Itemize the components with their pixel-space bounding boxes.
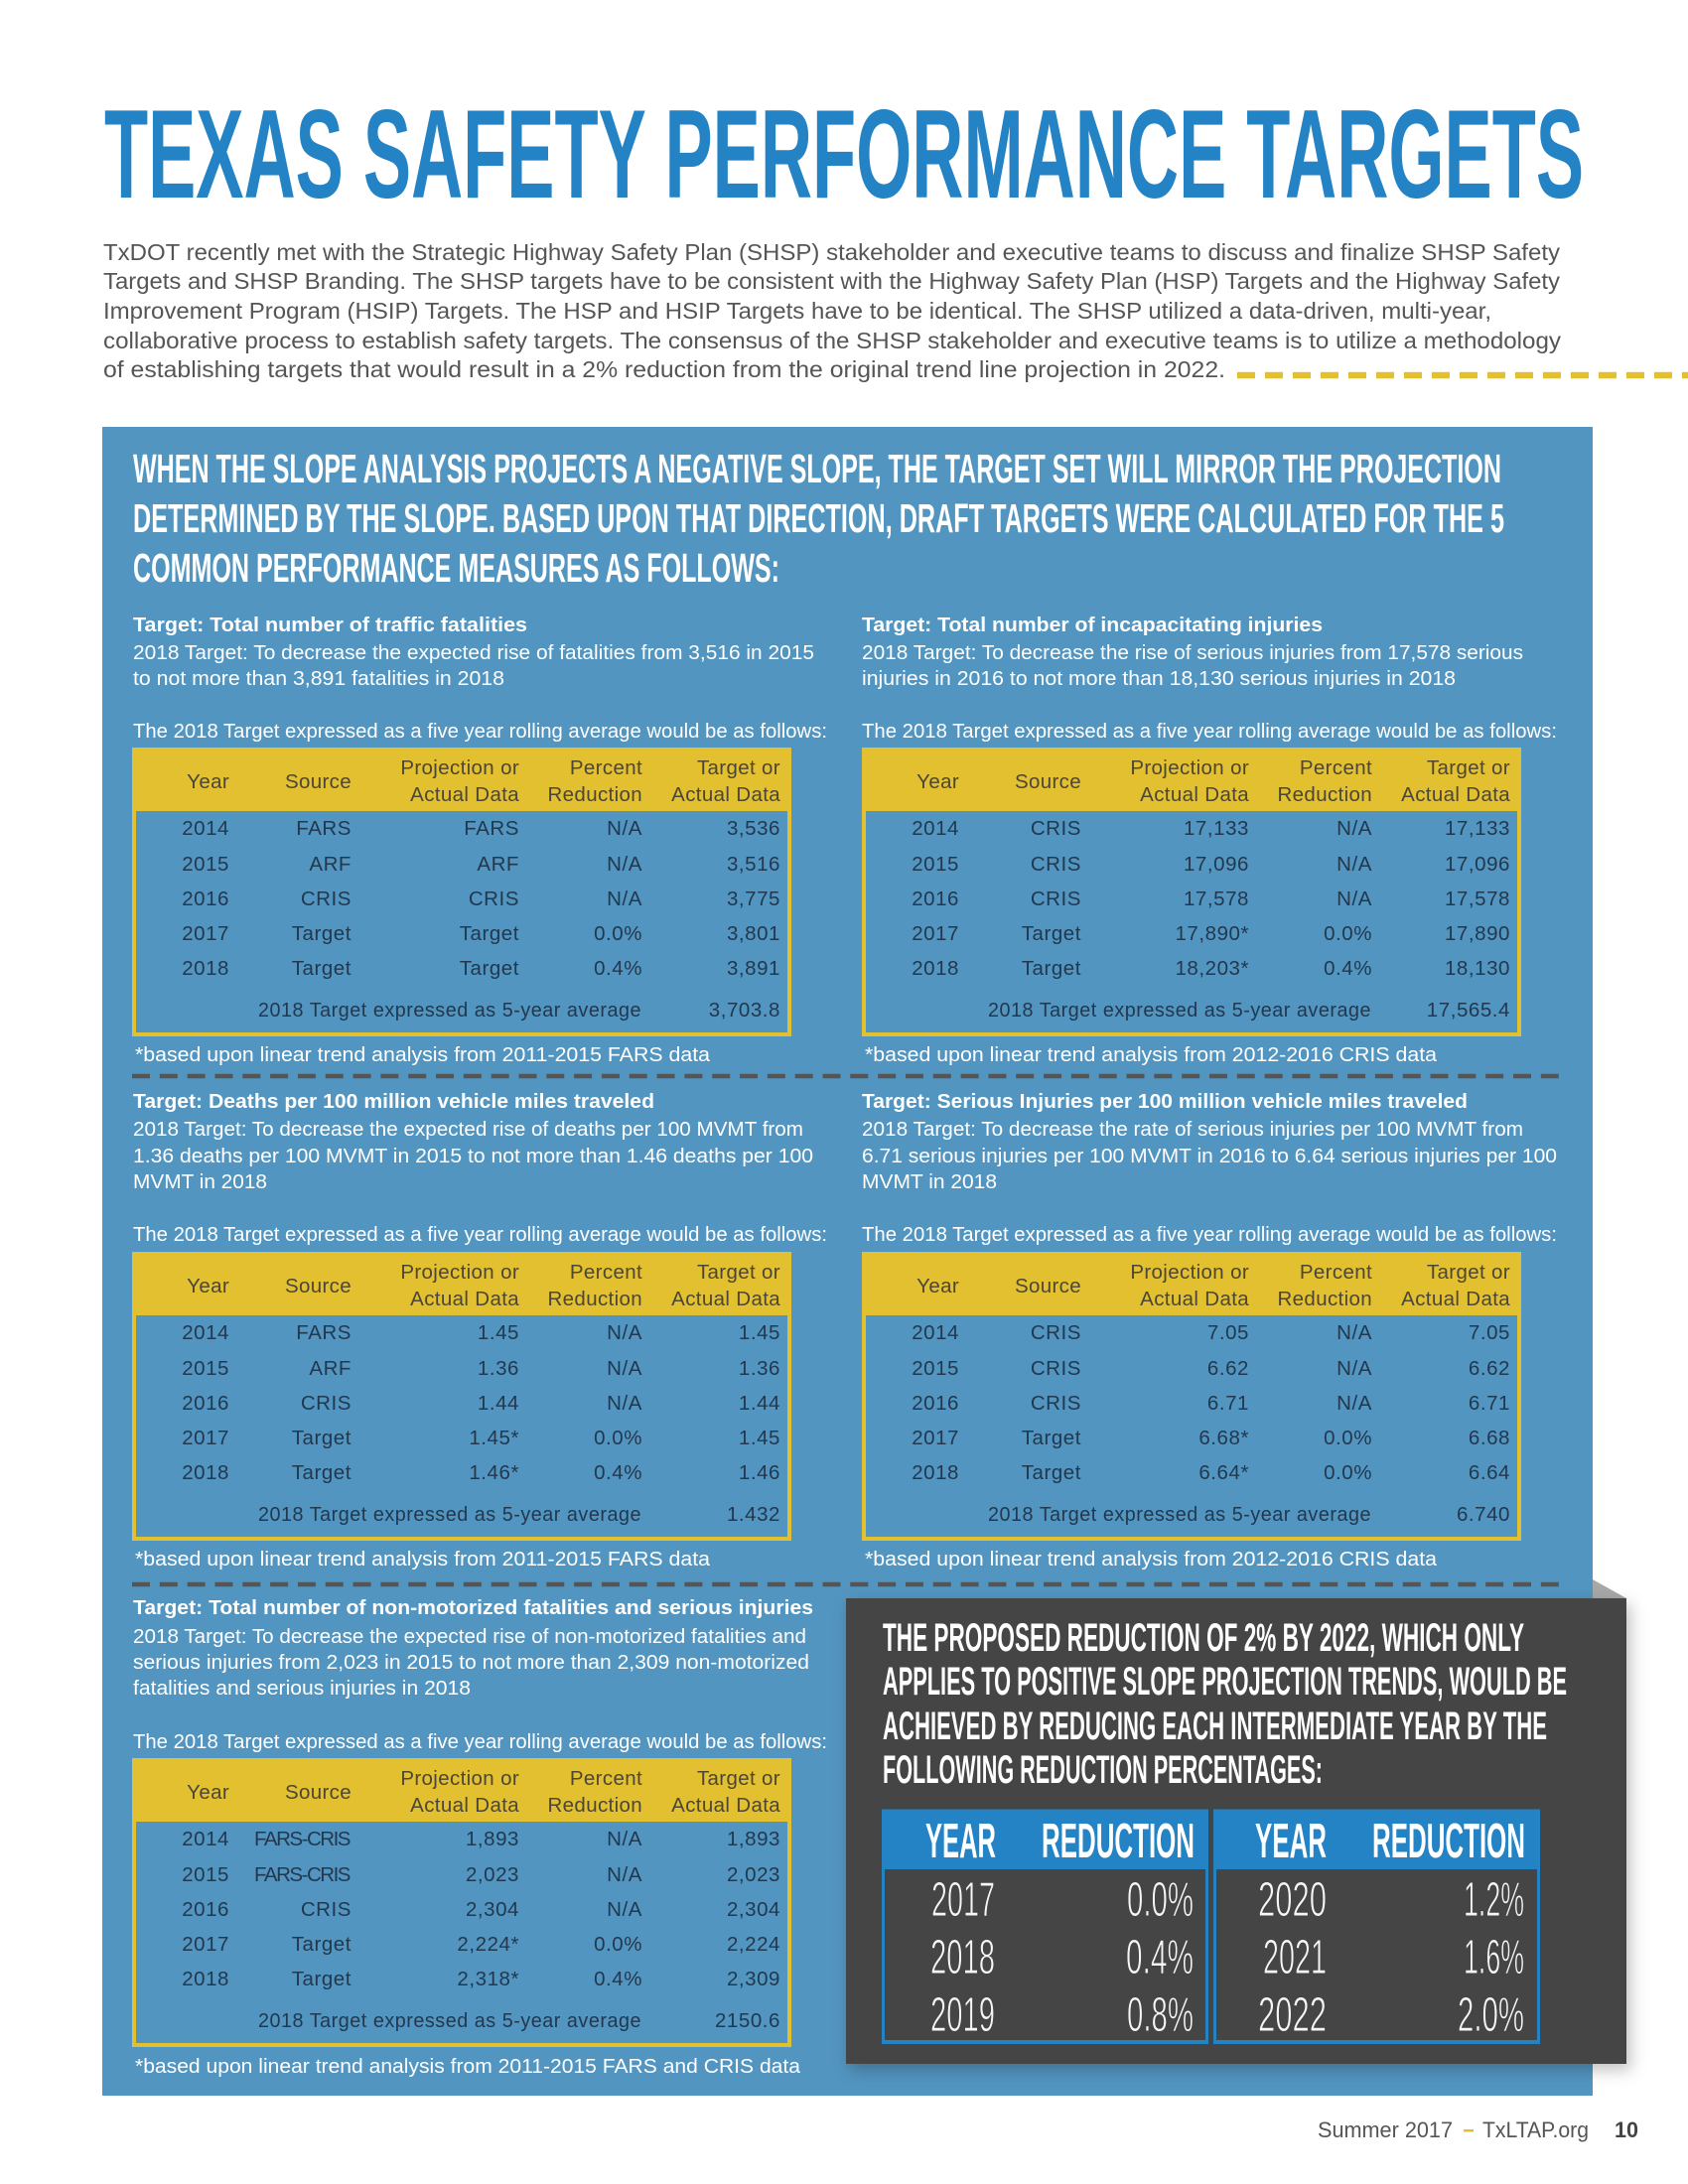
data table: non-motorized: 2,304 <box>727 1898 780 1921</box>
data table: serious injuries per 100M VMT: Target or <box>1427 1261 1510 1284</box>
data table: deaths per 100M VMT: 1.46* <box>469 1461 519 1484</box>
data table: fatalities: 2018 Target expressed as 5-year average <box>258 999 641 1022</box>
target description: MVMT in 2018 <box>862 1171 997 1193</box>
data table: serious injuries per 100M VMT: N/A <box>1336 1357 1372 1380</box>
data table: deaths per 100M VMT: Projection or <box>400 1261 519 1284</box>
data table: incapacitating injuries: 17,133 <box>1184 817 1249 840</box>
footnote: *based upon linear trend analysis from 2011-2015 FARS data <box>135 1044 711 1066</box>
reduction table: 2020 to 2022: 1.6% <box>1464 1931 1524 1984</box>
data table: deaths per 100M VMT: Year <box>187 1275 229 1297</box>
target description <box>862 642 1523 690</box>
data table: deaths per 100M VMT: 1.45* <box>469 1427 519 1449</box>
data table: deaths per 100M VMT: 1.45 <box>478 1321 519 1344</box>
data table: non-motorized: 2150.6 <box>715 2009 780 2032</box>
data table: serious injuries per 100M VMT: Actual Data <box>1140 1288 1249 1310</box>
target description <box>133 642 814 690</box>
data table: serious injuries per 100M VMT: 6.62 <box>1207 1357 1249 1380</box>
data table: incapacitating injuries: 17,890 <box>1445 922 1510 945</box>
data table: deaths per 100M VMT <box>132 1252 791 1539</box>
data table: deaths per 100M VMT: Actual Data <box>410 1288 519 1310</box>
data table: fatalities: N/A <box>607 853 642 876</box>
data table: non-motorized: Source <box>285 1781 352 1804</box>
data table: fatalities: FARS <box>296 817 352 840</box>
intro paragraph: Improvement Program (HSIP) Targets. The HSP and HSIP Targets have to be identical. The SHSP utilized a data-driven, multi-year, <box>103 298 1491 324</box>
data table: serious injuries per 100M VMT: N/A <box>1336 1321 1372 1344</box>
section: incapacitating injuries <box>862 614 1557 1066</box>
data table: serious injuries per 100M VMT: 6.71 <box>1469 1392 1510 1415</box>
data table: deaths per 100M VMT: 2014 <box>182 1321 229 1344</box>
data table: non-motorized: 2018 <box>182 1968 229 1990</box>
data table: incapacitating injuries: Source <box>1015 770 1081 793</box>
data table: incapacitating injuries <box>862 748 1521 1034</box>
data table: incapacitating injuries: 2014 <box>912 817 959 840</box>
target description: injuries in 2016 to not more than 18,130 serious injuries in 2018 <box>862 668 1456 690</box>
data table: incapacitating injuries: 17,565.4 <box>1427 999 1510 1022</box>
reduction table: 2020 to 2022: 2021 <box>1263 1931 1327 1984</box>
data table: serious injuries per 100M VMT: Target <box>1022 1427 1081 1449</box>
data table: deaths per 100M VMT: Target <box>292 1461 352 1484</box>
data table: deaths per 100M VMT: 0.4% <box>594 1461 642 1484</box>
data table: fatalities: Reduction <box>548 783 642 806</box>
target description: 2018 Target: To decrease the rise of serious injuries from 17,578 serious <box>862 642 1523 664</box>
data table: incapacitating injuries: 0.4% <box>1324 957 1372 980</box>
panel heading <box>133 446 1504 591</box>
data table: deaths per 100M VMT: 1.44 <box>478 1392 519 1415</box>
target description <box>133 1626 809 1700</box>
data table: non-motorized: 2,304 <box>466 1898 519 1921</box>
data table: fatalities: N/A <box>607 887 642 910</box>
data table: fatalities: Target <box>292 922 352 945</box>
data table: fatalities: Source <box>285 770 352 793</box>
data table: serious injuries per 100M VMT: 6.64* <box>1198 1461 1249 1484</box>
data table: serious injuries per 100M VMT: CRIS <box>1031 1321 1081 1344</box>
target description: 6.71 serious injuries per 100 MVMT in 2016 to 6.64 serious injuries per 100 <box>862 1146 1557 1167</box>
section: deaths per 100M VMT <box>132 1090 827 1570</box>
data table: serious injuries per 100M VMT: 6.62 <box>1469 1357 1510 1380</box>
data table: deaths per 100M VMT: FARS <box>296 1321 352 1344</box>
callout heading <box>883 1616 1567 1792</box>
reduction table: 2020 to 2022: 1.2% <box>1464 1873 1524 1927</box>
data table: deaths per 100M VMT: 1.36 <box>739 1357 780 1380</box>
footer <box>1318 2117 1638 2142</box>
data table: non-motorized: N/A <box>607 1898 642 1921</box>
data table: serious injuries per 100M VMT: CRIS <box>1031 1357 1081 1380</box>
intro paragraph <box>103 239 1561 382</box>
data table: non-motorized: 2014 <box>182 1828 229 1850</box>
data table: incapacitating injuries: 17,578 <box>1184 887 1249 910</box>
reduction table: 2017 to 2019: 0.8% <box>1127 1988 1194 2042</box>
data table: non-motorized: Actual Data <box>410 1794 519 1817</box>
table caption: The 2018 Target expressed as a five year rolling average would be as follows: <box>133 721 827 743</box>
data table: non-motorized: 2015 <box>182 1863 229 1886</box>
data table: serious injuries per 100M VMT: Reduction <box>1278 1288 1372 1310</box>
footer: TxLTAP.org <box>1482 2117 1589 2142</box>
data table: non-motorized: CRIS <box>301 1898 352 1921</box>
data table: incapacitating injuries: Actual Data <box>1140 783 1249 806</box>
data table: deaths per 100M VMT: 1.46 <box>739 1461 780 1484</box>
data table: incapacitating injuries: 18,203* <box>1175 957 1249 980</box>
data table: non-motorized: 0.4% <box>594 1968 642 1990</box>
reduction table: 2017 to 2019: YEAR <box>925 1815 996 1868</box>
data table: serious injuries per 100M VMT: N/A <box>1336 1392 1372 1415</box>
data table: incapacitating injuries: 2016 <box>912 887 959 910</box>
intro paragraph: collaborative process to establish safety targets. The consensus of the SHSP stakeholder and executive teams is to utilize a methodology <box>103 328 1561 353</box>
data table: fatalities: 3,801 <box>727 922 780 945</box>
data table: non-motorized: Reduction <box>548 1794 642 1817</box>
data table: deaths per 100M VMT: 1.45 <box>739 1427 780 1449</box>
data table: serious injuries per 100M VMT: Projection or <box>1130 1261 1249 1284</box>
data table: non-motorized: 1,893 <box>727 1828 780 1850</box>
data table: incapacitating injuries: Projection or <box>1130 756 1249 779</box>
data table: fatalities: Target <box>292 957 352 980</box>
data table: fatalities: 3,703.8 <box>709 999 780 1022</box>
data table: incapacitating injuries: 2018 Target expressed as 5-year average <box>988 999 1371 1022</box>
data table: fatalities: 2018 <box>182 957 229 980</box>
data table: deaths per 100M VMT: 2016 <box>182 1392 229 1415</box>
data table: deaths per 100M VMT: 1.36 <box>478 1357 519 1380</box>
data table: non-motorized: 1,893 <box>466 1828 519 1850</box>
data table: fatalities: FARS <box>464 817 519 840</box>
data table: deaths per 100M VMT: ARF <box>309 1357 352 1380</box>
data table: incapacitating injuries: 0.0% <box>1324 922 1372 945</box>
data table: non-motorized: 2,224 <box>727 1933 780 1956</box>
data table: non-motorized: N/A <box>607 1828 642 1850</box>
data table: deaths per 100M VMT: 2018 <box>182 1461 229 1484</box>
data table: deaths per 100M VMT: 1.45 <box>739 1321 780 1344</box>
data table: incapacitating injuries: Target or <box>1427 756 1510 779</box>
data table: deaths per 100M VMT: 1.432 <box>727 1503 780 1526</box>
data table: fatalities: Target or <box>697 756 780 779</box>
data table: serious injuries per 100M VMT: 6.71 <box>1207 1392 1249 1415</box>
data table: deaths per 100M VMT: Percent <box>570 1261 642 1284</box>
data table: deaths per 100M VMT: 1.44 <box>739 1392 780 1415</box>
data table: serious injuries per 100M VMT: 2014 <box>912 1321 959 1344</box>
data table: incapacitating injuries: 17,890* <box>1175 922 1249 945</box>
reduction table: 2020 to 2022: 2022 <box>1258 1988 1327 2042</box>
target description: 2018 Target: To decrease the expected rise of deaths per 100 MVMT from <box>133 1119 803 1141</box>
data table: serious injuries per 100M VMT: Year <box>916 1275 959 1297</box>
data table: fatalities: CRIS <box>301 887 352 910</box>
data table: non-motorized: 2,309 <box>727 1968 780 1990</box>
data table: non-motorized: Actual Data <box>671 1794 780 1817</box>
target description: 2018 Target: To decrease the rate of serious injuries per 100 MVMT from <box>862 1119 1523 1141</box>
data table: incapacitating injuries: 17,096 <box>1184 853 1249 876</box>
data table: incapacitating injuries: 17,578 <box>1445 887 1510 910</box>
data table: incapacitating injuries: CRIS <box>1031 853 1081 876</box>
target description <box>133 1119 813 1193</box>
data table: fatalities: 0.0% <box>594 922 642 945</box>
data table: serious injuries per 100M VMT: 6.68 <box>1469 1427 1510 1449</box>
reduction table: 2017 to 2019: 0.0% <box>1127 1873 1194 1927</box>
target heading: Target: Total number of non-motorized fatalities and serious injuries <box>133 1596 813 1619</box>
section: serious injuries per 100M VMT <box>862 1090 1557 1570</box>
data table: deaths per 100M VMT: N/A <box>607 1392 642 1415</box>
data table: fatalities: Percent <box>570 756 642 779</box>
data table: deaths per 100M VMT: Source <box>285 1275 352 1297</box>
reduction table: 2020 to 2022: 2020 <box>1258 1873 1327 1927</box>
footnote: *based upon linear trend analysis from 2012-2016 CRIS data <box>865 1549 1438 1570</box>
data table: fatalities: 3,516 <box>727 853 780 876</box>
data table: non-motorized: FARS-CRIS <box>254 1863 352 1886</box>
table caption: The 2018 Target expressed as a five year rolling average would be as follows: <box>862 1224 1557 1246</box>
data table: incapacitating injuries: N/A <box>1336 817 1372 840</box>
data table: deaths per 100M VMT: 2018 Target expressed as 5-year average <box>258 1503 641 1526</box>
intro paragraph: of establishing targets that would result in a 2% reduction from the original trend line projection in 2022. <box>103 356 1225 382</box>
table caption: The 2018 Target expressed as a five year rolling average would be as follows: <box>133 1731 827 1753</box>
target heading: Target: Serious Injuries per 100 million vehicle miles traveled <box>862 1090 1468 1113</box>
panel heading: COMMON PERFORMANCE MEASURES AS FOLLOWS: <box>133 545 779 591</box>
data table: non-motorized: 2,224* <box>457 1933 519 1956</box>
data table: incapacitating injuries: CRIS <box>1031 887 1081 910</box>
target heading: Target: Deaths per 100 million vehicle miles traveled <box>133 1090 654 1113</box>
table caption: The 2018 Target expressed as a five year rolling average would be as follows: <box>133 1224 827 1246</box>
target description: MVMT in 2018 <box>133 1171 267 1193</box>
data table: serious injuries per 100M VMT: 2017 <box>912 1427 959 1449</box>
data table: fatalities: ARF <box>309 853 352 876</box>
target heading: Target: Total number of traffic fatalities <box>133 614 527 636</box>
footnote: *based upon linear trend analysis from 2012-2016 CRIS data <box>865 1044 1438 1066</box>
data table: non-motorized: FARS-CRIS <box>254 1828 352 1850</box>
target description: 1.36 deaths per 100 MVMT in 2015 to not more than 1.46 deaths per 100 <box>133 1146 813 1167</box>
data table: non-motorized: Target or <box>697 1767 780 1790</box>
data table: incapacitating injuries: CRIS <box>1031 817 1081 840</box>
target description: serious injuries from 2,023 in 2015 to not more than 2,309 non-motorized <box>133 1652 809 1674</box>
data table: incapacitating injuries: 18,130 <box>1445 957 1510 980</box>
target description <box>862 1119 1557 1193</box>
data table: serious injuries per 100M VMT: 2016 <box>912 1392 959 1415</box>
data table: fatalities: 3,891 <box>727 957 780 980</box>
data table: incapacitating injuries: Target <box>1022 922 1081 945</box>
data table: non-motorized: 2,318* <box>457 1968 519 1990</box>
data table: deaths per 100M VMT: CRIS <box>301 1392 352 1415</box>
data table: fatalities: Target <box>460 957 519 980</box>
data table: serious injuries per 100M VMT: 2015 <box>912 1357 959 1380</box>
data table: incapacitating injuries: Actual Data <box>1401 783 1510 806</box>
data table: non-motorized: 2018 Target expressed as 5-year average <box>258 2009 641 2032</box>
data table: serious injuries per 100M VMT: 7.05 <box>1469 1321 1510 1344</box>
reduction table: 2020 to 2022: 2.0% <box>1458 1988 1524 2042</box>
data table: serious injuries per 100M VMT: Target <box>1022 1461 1081 1484</box>
callout: reduction percentages <box>846 1579 1626 2064</box>
data table: incapacitating injuries: 17,096 <box>1445 853 1510 876</box>
data table: fatalities: Year <box>187 770 229 793</box>
data table: deaths per 100M VMT: N/A <box>607 1357 642 1380</box>
data table: fatalities: 0.4% <box>594 957 642 980</box>
intro paragraph: TxDOT recently met with the Strategic Highway Safety Plan (SHSP) stakeholder and executive teams to discuss and finalize SHSP Safety <box>103 239 1560 265</box>
data table: incapacitating injuries: 2018 <box>912 957 959 980</box>
data table: fatalities: 3,775 <box>727 887 780 910</box>
data table: fatalities: 2014 <box>182 817 229 840</box>
data table: incapacitating injuries: Target <box>1022 957 1081 980</box>
data table: non-motorized: N/A <box>607 1863 642 1886</box>
data table: deaths per 100M VMT: 2017 <box>182 1427 229 1449</box>
callout heading: FOLLOWING REDUCTION PERCENTAGES: <box>883 1748 1323 1792</box>
footnote: *based upon linear trend analysis from 2011-2015 FARS data <box>135 1549 711 1570</box>
data table: non-motorized <box>132 1758 791 2045</box>
data table: incapacitating injuries: Reduction <box>1278 783 1372 806</box>
footnote: *based upon linear trend analysis from 2011-2015 FARS and CRIS data <box>135 2056 801 2078</box>
data table: serious injuries per 100M VMT: 7.05 <box>1207 1321 1249 1344</box>
data table: deaths per 100M VMT: 0.0% <box>594 1427 642 1449</box>
panel: slope analysis targets <box>102 427 1593 2096</box>
data table: incapacitating injuries: N/A <box>1336 853 1372 876</box>
footer: Summer 2017 <box>1318 2117 1453 2142</box>
data table: fatalities: 2015 <box>182 853 229 876</box>
data table: fatalities: N/A <box>607 817 642 840</box>
data table: serious injuries per 100M VMT: Actual Data <box>1401 1288 1510 1310</box>
reduction table: 2017 to 2019: 2019 <box>930 1988 995 2042</box>
data table: non-motorized: Year <box>187 1781 229 1804</box>
target heading: Target: Total number of incapacitating injuries <box>862 614 1323 636</box>
data table: non-motorized: 0.0% <box>594 1933 642 1956</box>
data table: non-motorized: 2,023 <box>727 1863 780 1886</box>
data table: deaths per 100M VMT: Actual Data <box>671 1288 780 1310</box>
data table: serious injuries per 100M VMT: Percent <box>1300 1261 1372 1284</box>
data table: deaths per 100M VMT: N/A <box>607 1321 642 1344</box>
data table: serious injuries per 100M VMT: 0.0% <box>1324 1461 1372 1484</box>
data table: incapacitating injuries: Percent <box>1300 756 1372 779</box>
target description: fatalities and serious injuries in 2018 <box>133 1678 471 1700</box>
reduction table: 2017 to 2019: 2018 <box>930 1931 995 1984</box>
data table: fatalities: Projection or <box>400 756 519 779</box>
data table: non-motorized: Percent <box>570 1767 642 1790</box>
data table: serious injuries per 100M VMT: 6.740 <box>1457 1503 1510 1526</box>
target description: to not more than 3,891 fatalities in 2018 <box>133 668 504 690</box>
data table: non-motorized: 2016 <box>182 1898 229 1921</box>
reduction table: 2017 to 2019: REDUCTION <box>1042 1815 1195 1868</box>
data table: fatalities: CRIS <box>469 887 519 910</box>
data table: fatalities: 3,536 <box>727 817 780 840</box>
footer: 10 <box>1615 2117 1638 2142</box>
data table: non-motorized: 2,023 <box>466 1863 519 1886</box>
data table: non-motorized: Target <box>292 1933 352 1956</box>
data table: fatalities: Actual Data <box>671 783 780 806</box>
data table: non-motorized: 2017 <box>182 1933 229 1956</box>
data table: fatalities: 2017 <box>182 922 229 945</box>
data table: serious injuries per 100M VMT: Source <box>1015 1275 1081 1297</box>
data table: incapacitating injuries: 2017 <box>912 922 959 945</box>
reduction table: 2017 to 2019: 0.4% <box>1126 1931 1194 1984</box>
section: non-motorized fatalities and serious injuries <box>132 1596 827 2078</box>
data table: deaths per 100M VMT: Target or <box>697 1261 780 1284</box>
data table: serious injuries per 100M VMT: 2018 <box>912 1461 959 1484</box>
section: traffic fatalities <box>132 614 827 1066</box>
data table: fatalities: Target <box>460 922 519 945</box>
reduction table: 2017 to 2019: 2017 <box>931 1873 995 1927</box>
data table: serious injuries per 100M VMT: 2018 Target expressed as 5-year average <box>988 1503 1371 1526</box>
data table: serious injuries per 100M VMT: 0.0% <box>1324 1427 1372 1449</box>
data table: fatalities: ARF <box>477 853 519 876</box>
reduction table: 2020 to 2022: YEAR <box>1255 1815 1327 1868</box>
data table: non-motorized: Target <box>292 1968 352 1990</box>
data table: incapacitating injuries: N/A <box>1336 887 1372 910</box>
reduction table: 2020 to 2022: REDUCTION <box>1372 1815 1525 1868</box>
target description: 2018 Target: To decrease the expected rise of fatalities from 3,516 in 2015 <box>133 642 814 664</box>
intro paragraph: Targets and SHSP Branding. The SHSP targets have to be consistent with the Highway Safety Plan (HSP) Targets and the Highway Safety <box>103 268 1560 294</box>
table caption: The 2018 Target expressed as a five year rolling average would be as follows: <box>862 721 1557 743</box>
data table: incapacitating injuries: 2015 <box>912 853 959 876</box>
data table: fatalities <box>132 748 791 1034</box>
data table: fatalities: Actual Data <box>410 783 519 806</box>
data table: serious injuries per 100M VMT: 6.68* <box>1198 1427 1249 1449</box>
target description: 2018 Target: To decrease the expected rise of non-motorized fatalities and <box>133 1626 806 1648</box>
data table: serious injuries per 100M VMT: 6.64 <box>1469 1461 1510 1484</box>
reduction table: 2020 to 2022 <box>1213 1810 1540 2042</box>
data table: deaths per 100M VMT: Target <box>292 1427 352 1449</box>
data table: deaths per 100M VMT: 2015 <box>182 1357 229 1380</box>
data table: incapacitating injuries: Year <box>916 770 959 793</box>
data table: fatalities: 2016 <box>182 887 229 910</box>
data table: deaths per 100M VMT: Reduction <box>548 1288 642 1310</box>
data table: incapacitating injuries: 17,133 <box>1445 817 1510 840</box>
data table: non-motorized: Projection or <box>400 1767 519 1790</box>
reduction table: 2017 to 2019 <box>882 1810 1208 2042</box>
data table: serious injuries per 100M VMT <box>862 1252 1521 1539</box>
data table: serious injuries per 100M VMT: CRIS <box>1031 1392 1081 1415</box>
